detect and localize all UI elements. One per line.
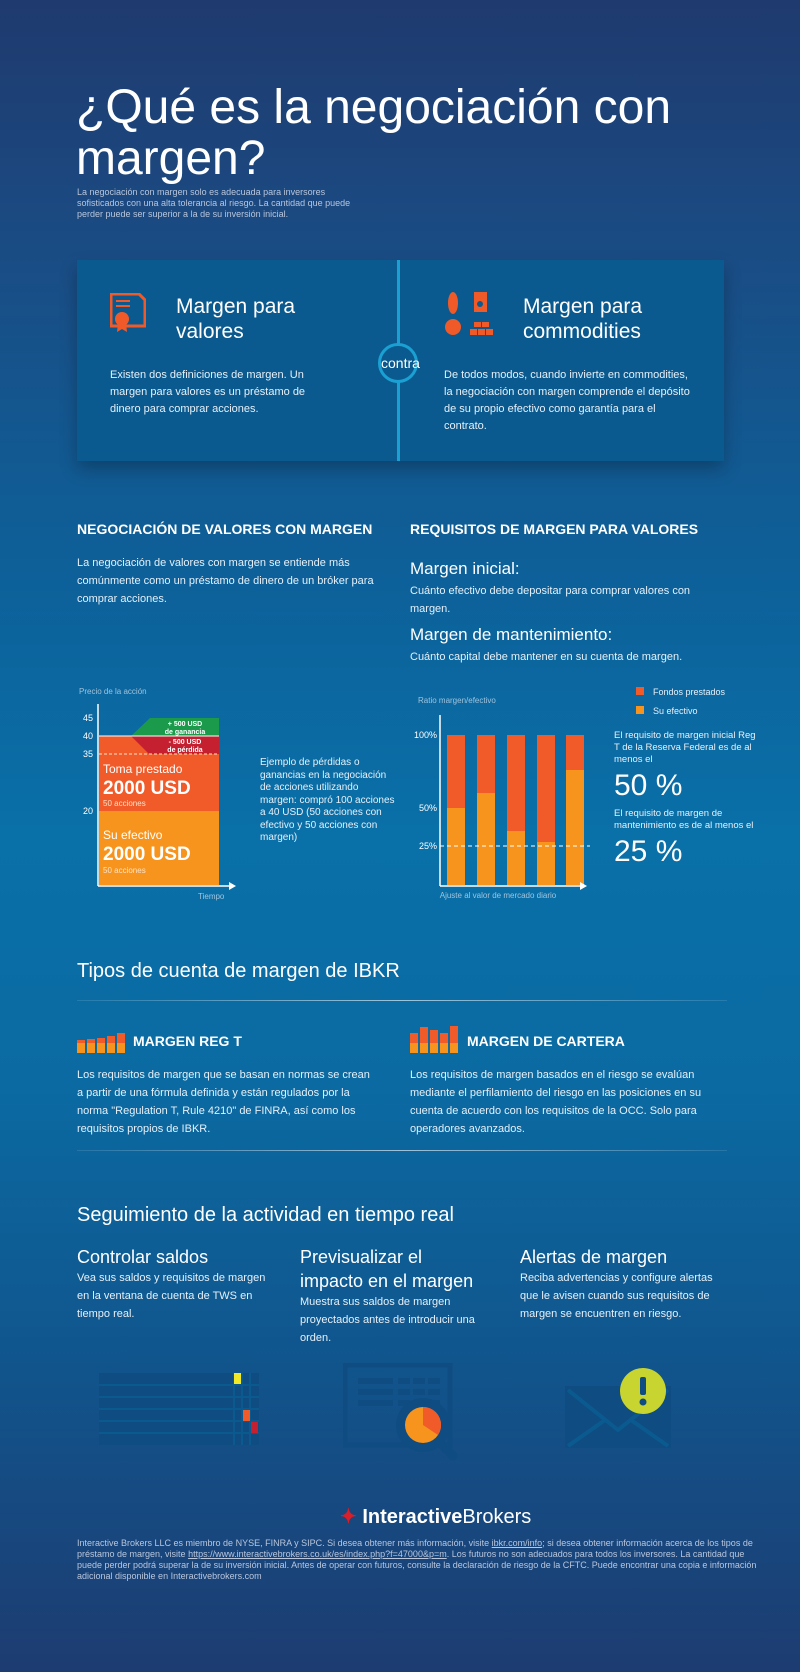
icon: document with magnifier	[343, 1363, 452, 1443]
chart: stock price example	[79, 687, 236, 901]
column: controlar saldos: Controlar saldos	[77, 1247, 208, 1267]
heading: negociacion de valores: NEGOCIACIÓN DE VALORES CON MARGEN	[77, 521, 372, 537]
subtitle: La negociación con margen solo es adecuada para inversores sofisticados con una alta tolerancia al riesgo. La cantidad que puede perder puede ser superior a la de su inversión inicial.	[77, 187, 350, 219]
chart: stock price example: Tiempo	[198, 892, 225, 901]
legend	[636, 687, 725, 716]
chart: margin ratio bars: Ratio margen/efectivo	[418, 696, 496, 705]
chart: stock price example: 20	[83, 806, 93, 816]
chart: stock price example: 35	[83, 749, 93, 759]
column: previsualizar: Muestra sus saldos de margen proyectados antes de introducir una orden.	[300, 1296, 475, 1344]
column: previsualizar: Previsualizar el	[300, 1247, 422, 1267]
contra label	[378, 343, 418, 383]
heading: Margen para valores: valores	[176, 320, 244, 343]
chart: margin ratio bars: 100%	[414, 730, 437, 740]
heading: margen reg T: MARGEN REG T	[133, 1033, 242, 1049]
heading: Margen para commodities: Margen para	[523, 295, 642, 318]
icon: balances table	[99, 1373, 259, 1445]
icon: reg T bars	[77, 1033, 125, 1053]
block: margen mantenimiento: Cuánto capital debe mantener en su cuenta de margen.	[410, 651, 682, 663]
stat: 50%: 50 %	[614, 769, 682, 802]
chart: stock price example: 45	[83, 713, 93, 723]
chart: stock price example: 40	[83, 731, 93, 741]
heading: margen de cartera: MARGEN DE CARTERA	[467, 1033, 625, 1049]
heading: tipos de cuenta: Tipos de cuenta de margen de IBKR	[77, 960, 400, 982]
column: alertas: Alertas de margen	[520, 1247, 667, 1267]
text: commodities: De todos modos, cuando invierte en commodities, la negociación con margen comprende el depósito de su propio efectivo como garantía para el contrato.	[444, 369, 690, 432]
chart: stock price example: Precio de la acción	[79, 687, 147, 696]
chart: margin ratio bars: 50%	[419, 803, 437, 813]
column: controlar saldos	[77, 1247, 265, 1320]
chart: stock price example: - 500 USD	[169, 739, 201, 746]
chart: stock price example: Su efectivo	[103, 828, 163, 842]
chart: stock price example: de ganancia	[165, 729, 205, 736]
block: margen mantenimiento	[410, 625, 682, 663]
text: example: Ejemplo de pérdidas o ganancias en la negociación de acciones utilizando margen: compró 100 acciones a 40 USD (50 acciones con efectivo y 50 acciones con margen)	[260, 757, 395, 843]
stat: 25%: El requisito de margen de mantenimiento es de al menos el	[614, 808, 753, 831]
stat: 50%	[614, 730, 756, 802]
block: margen inicial: Margen inicial:	[410, 559, 520, 578]
contra label: contra	[381, 355, 420, 371]
stat: 50%: El requisito de margen inicial Reg T de la Reserva Federal es de al menos el	[614, 730, 756, 765]
chart: stock price example: 50 acciones	[103, 799, 146, 808]
icon: commodities	[445, 292, 493, 335]
chart: stock price example: 50 acciones	[103, 866, 146, 875]
heading: Margen para commodities: commodities	[523, 320, 641, 343]
text: reg T: Los requisitos de margen que se basan en normas se crean a partir de una fórmula definida y están regulados por la norma "Regulation T, Rule 4210" de FINRA, así como los requisitos propios de IBKR.	[77, 1069, 370, 1135]
block: margen inicial: Cuánto efectivo debe depositar para comprar valores con margen.	[410, 585, 690, 615]
panel: comparison	[77, 260, 724, 461]
stat: 25%	[614, 808, 753, 868]
heading: seguimiento: Seguimiento de la actividad en tiempo real	[77, 1204, 454, 1226]
heading: Margen para valores: Margen para	[176, 295, 295, 318]
block: margen mantenimiento: Margen de mantenimiento:	[410, 625, 612, 644]
chart: stock price example: 2000 USD	[103, 844, 191, 865]
heading: Margen para valores	[176, 295, 296, 343]
chart: stock price example: + 500 USD	[168, 721, 202, 728]
title: ¿Qué es la negociación con margen?	[76, 81, 671, 185]
text: valores: Existen dos definiciones de margen. Un margen para valores es un préstamo de dinero para comprar acciones.	[110, 369, 305, 415]
chart: margin ratio bars	[414, 696, 590, 900]
text: negociacion: La negociación de valores con margen se entiende más comúnmente como un préstamo de dinero de un bróker para comprar acciones.	[77, 557, 374, 605]
chart: margin ratio bars: 25%	[419, 841, 437, 851]
heading: Margen para commodities	[523, 295, 642, 343]
column: previsualizar	[300, 1247, 475, 1344]
column: previsualizar: impacto en el margen	[300, 1271, 473, 1291]
block: margen inicial	[410, 559, 690, 615]
legend: Fondos prestados	[653, 687, 725, 697]
chart: stock price example: Toma prestado	[103, 762, 183, 776]
icon: envelope alert	[565, 1368, 671, 1448]
legend: Su efectivo	[653, 706, 698, 716]
icon: portfolio bars	[410, 1026, 458, 1053]
text: cartera: Los requisitos de margen basados en el riesgo se evalúan mediante el perfilamiento del riesgo en las posiciones en su cuenta de acuerdo con los requisitos de la OCC. Solo para operadores avanzados.	[410, 1069, 701, 1135]
stat: 25%: 25 %	[614, 835, 682, 868]
column: controlar saldos: Vea sus saldos y requisitos de margen en la ventana de cuenta de TWS en tiempo real.	[77, 1272, 265, 1320]
column: alertas	[520, 1247, 713, 1320]
chart: stock price example: 2000 USD	[103, 778, 191, 799]
icon: certificate	[110, 293, 146, 332]
footer: Interactive Brokers LLC es miembro de NYSE, FINRA y SIPC. Si desea obtener más información, visite ibkr.com/info; si desea obtener información acerca de los tipos de préstamo de margen, visite https://www.interactivebrokers.co.uk/es/index.php?f=47000&p=m. Los futuros no son adecuados para todos los inversores. La cantidad que puede perder podrá superar la de su inversión inicial. Antes de operar con futuros, consulte la declaración de riesgo de la CFTC. Puede encontrar una copia e información adicional disponible en Interactivebrokers.com	[77, 1538, 756, 1581]
chart: margin ratio bars: Ajuste al valor de mercado diario	[440, 891, 557, 900]
heading: requisitos: REQUISITOS DE MARGEN PARA VALORES	[410, 521, 698, 537]
column: alertas: Reciba advertencias y configure alertas que le avisen cuando sus requisitos de margen se encuentren en riesgo.	[520, 1272, 713, 1320]
logo: ✦ InteractiveBrokers	[340, 1506, 531, 1528]
chart: stock price example: de pérdida	[167, 747, 203, 754]
divider with contra circle	[397, 260, 400, 461]
